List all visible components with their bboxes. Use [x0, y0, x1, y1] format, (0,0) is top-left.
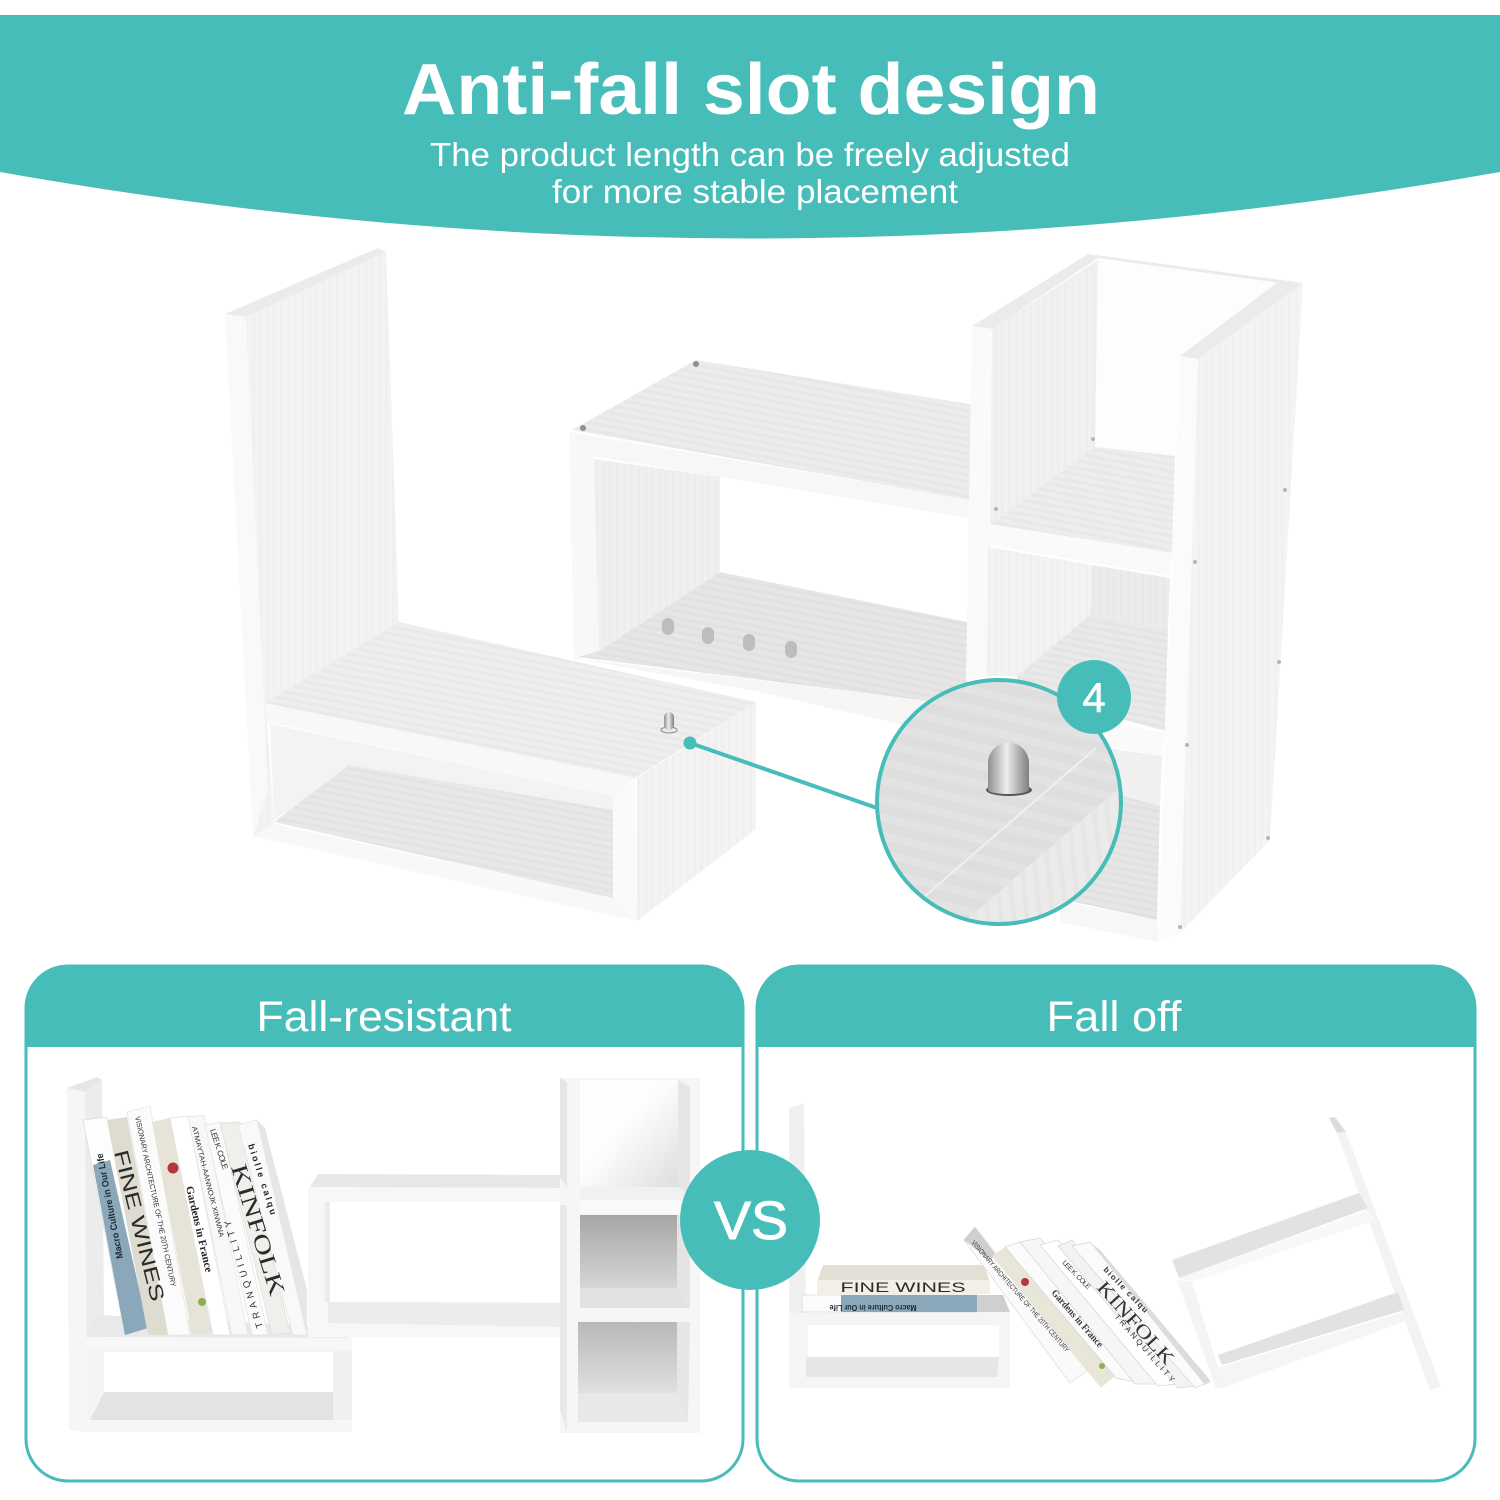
- icon: metal pin: [661, 712, 677, 733]
- inner left wall: [990, 260, 1098, 524]
- second compartment: [580, 1215, 677, 1288]
- book title: FINE WINES: [840, 1279, 966, 1295]
- subtitle: The product length can be freely adjusted: [430, 136, 1070, 173]
- right tower: [560, 1078, 700, 1433]
- book spine titles: ATMAYTAH-AANNOJK XINWNA: [190, 1126, 225, 1238]
- book: floral: [152, 1118, 212, 1335]
- book spine titles: Macro Culture in Our Life: [95, 1152, 126, 1260]
- header banner: for more stable placement: [552, 173, 958, 210]
- header banner: [0, 15, 1500, 238]
- book titles: VISIONARY ARCHITECTURE OF THE 20TH CENTURY: [969, 1240, 1070, 1354]
- lower shelf front: [1050, 712, 1165, 756]
- tipped right shelf: [1172, 1117, 1441, 1390]
- book spine titles: TRANQUILLITY: [222, 1218, 266, 1329]
- book titles: Gardens in France: [1049, 1288, 1105, 1350]
- book spine titles: KINFOLK: [226, 1161, 290, 1299]
- leader line: [684, 736, 877, 808]
- top rim: [972, 254, 1303, 329]
- right panel: [1180, 283, 1303, 933]
- right tower unit: [966, 254, 1303, 942]
- top compartment: [580, 1080, 678, 1187]
- center shelf: [308, 1174, 567, 1337]
- book spine titles: VISIONARY ARCHITECTURE OF THE 20TH CENTURY: [133, 1116, 178, 1288]
- book spine titles: LEE K. COLE: [208, 1128, 230, 1171]
- book titles: KINFOLK: [1092, 1277, 1178, 1370]
- VS badge: VS: [714, 1191, 788, 1251]
- book: Visionary Architecture: [127, 1106, 190, 1335]
- badge number 4: 4: [1082, 674, 1106, 721]
- book: Gardens in France: [170, 1116, 230, 1335]
- adjustment slots: [662, 618, 797, 658]
- book: Macro Culture: [83, 1117, 148, 1335]
- panel: fall-resistant: [25, 965, 744, 1481]
- compartment two: [987, 547, 1092, 676]
- book: Kinfolk: [220, 1122, 290, 1335]
- book: Tranquillity: [205, 1122, 268, 1335]
- compartment three: [1100, 747, 1162, 806]
- book spine titles: FINE WINES: [109, 1148, 168, 1304]
- title: Anti-fall slot design: [402, 50, 1100, 130]
- magnifier callout: [875, 678, 1123, 926]
- book titles: biolle calqu: [1102, 1265, 1150, 1315]
- heading: Fall-resistant: [256, 993, 512, 1041]
- badge number 4: [1057, 660, 1131, 734]
- fallen books: [964, 1227, 1210, 1388]
- book title: Macro Culture in Our Life: [829, 1303, 916, 1312]
- book: A. Zimmerman: [188, 1115, 248, 1335]
- shelf front: [988, 524, 1172, 576]
- VS badge: [680, 1150, 820, 1290]
- book titles: TRANQUILLITY: [1112, 1312, 1177, 1384]
- panel: fall off: [756, 965, 1476, 1481]
- third compartment: [578, 1322, 677, 1393]
- book spine titles: Gardens in France: [183, 1185, 215, 1274]
- book: Bruno: [238, 1120, 307, 1335]
- book: Fine Wines: [107, 1117, 168, 1335]
- book spine titles: biolle calqu: [246, 1143, 278, 1216]
- middle shelf unit: [569, 360, 975, 735]
- left bookend unit: [225, 248, 756, 921]
- left bookend: [67, 1077, 352, 1432]
- book spine titles: [95, 1116, 290, 1329]
- book titles: [969, 1240, 1178, 1384]
- shelf with books: [67, 1077, 700, 1433]
- books upright: [83, 1106, 307, 1335]
- icon: metal pin enlarged: [986, 742, 1032, 796]
- book titles: LEE K. COLE: [1061, 1260, 1092, 1291]
- upper shelf surface: [990, 447, 1175, 553]
- main shelf illustration: [225, 248, 1303, 942]
- left post: [966, 326, 992, 680]
- back wall: [1095, 258, 1280, 456]
- heading: Fall off: [1046, 993, 1183, 1041]
- broken left shelf with stacked books: [789, 1103, 1010, 1388]
